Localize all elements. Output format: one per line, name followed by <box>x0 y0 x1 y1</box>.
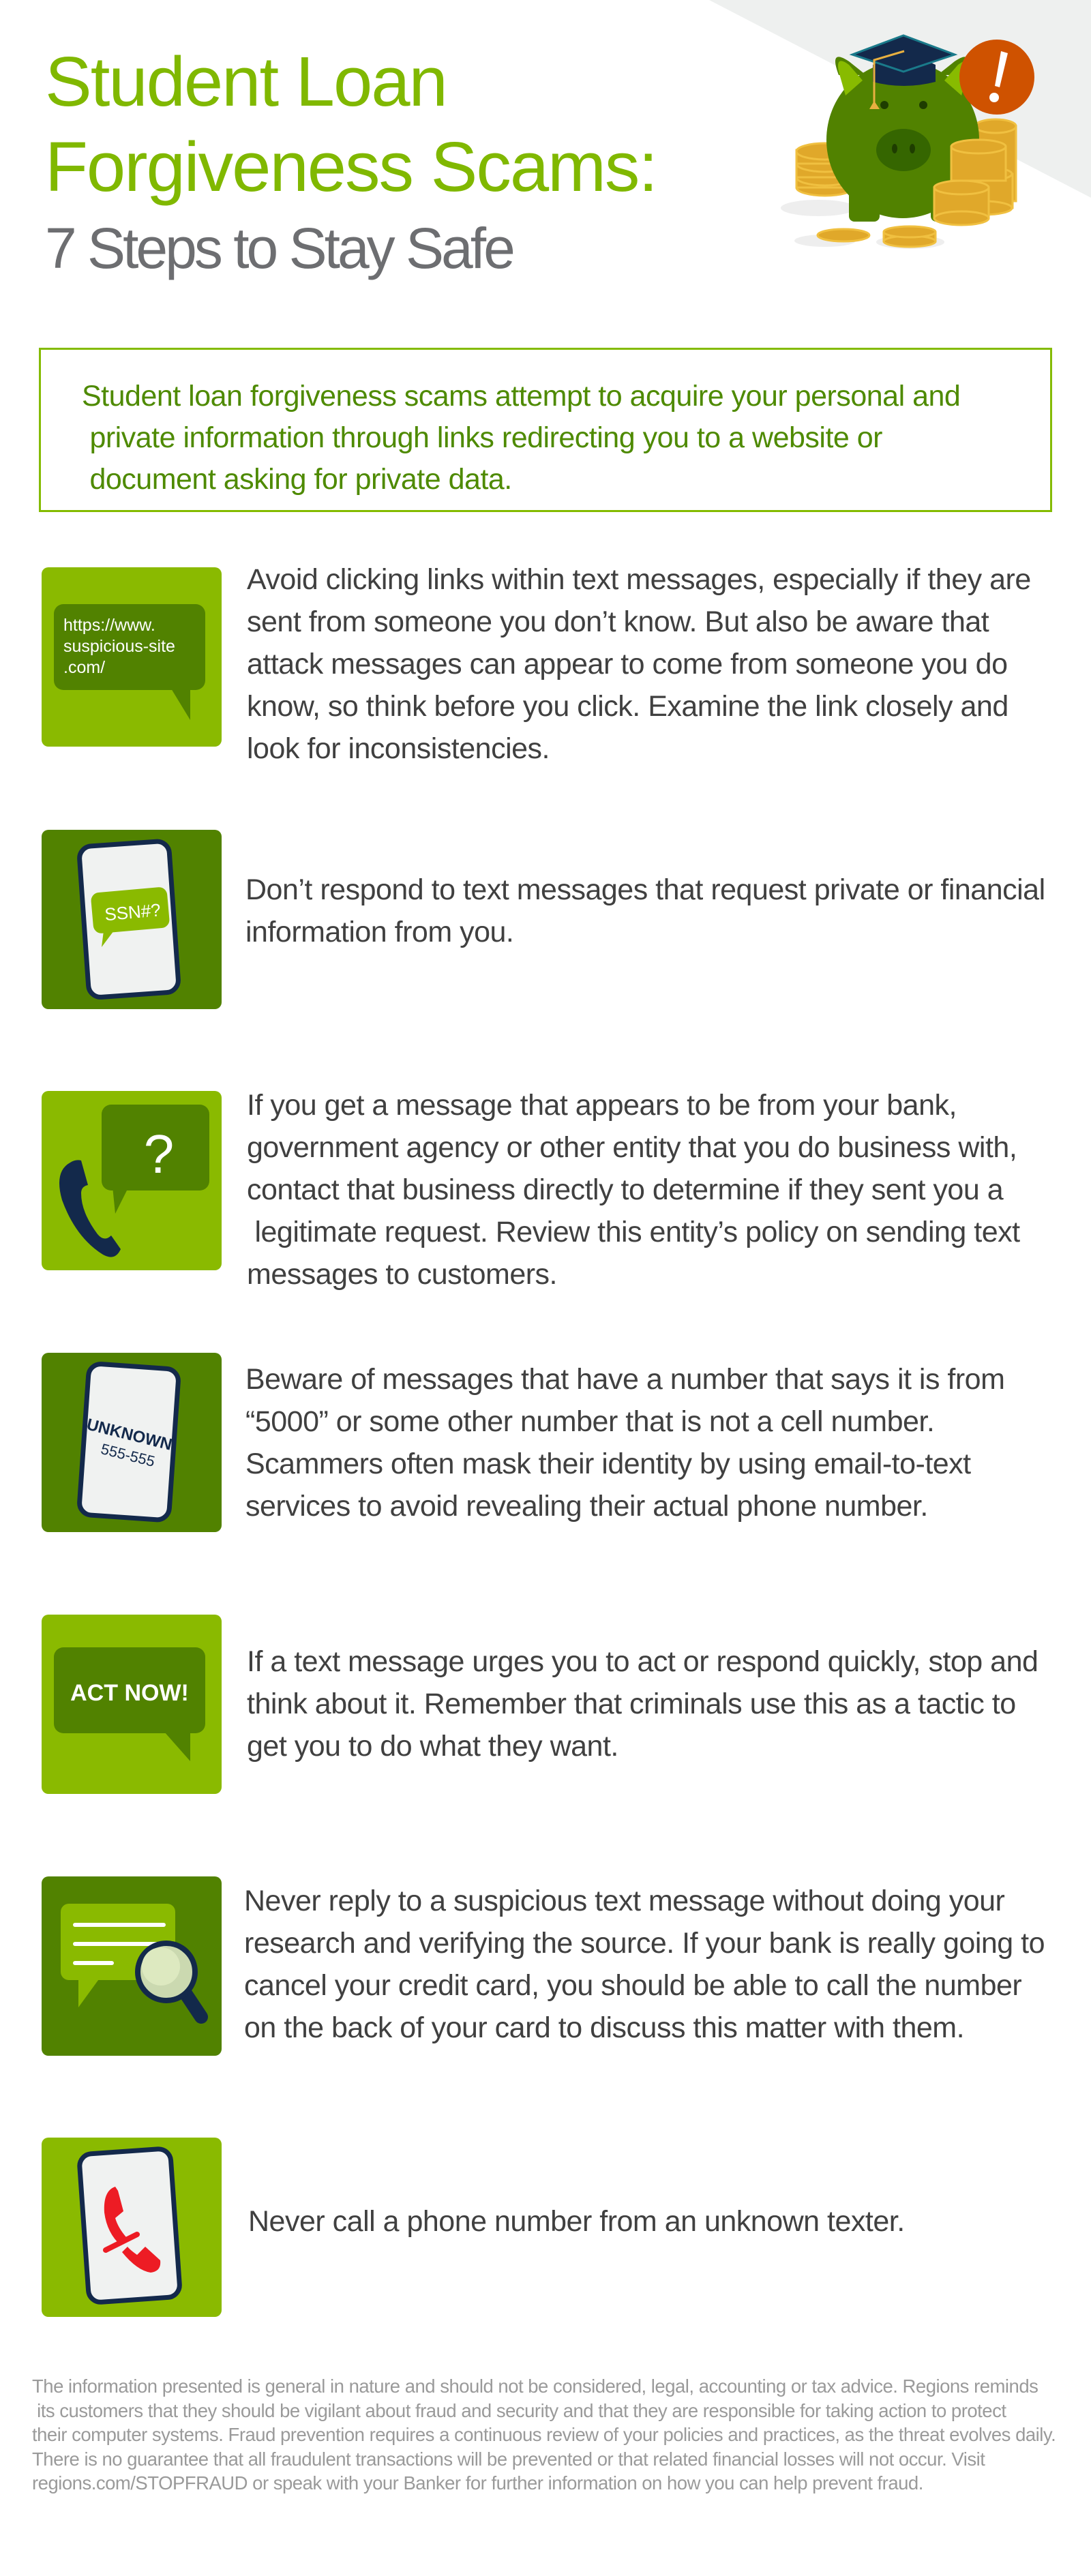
step 3 text: contact that business directly to determine if they sent you a <box>247 1173 1003 1206</box>
step 2 text: Don’t respond to text messages that request private or financial <box>245 873 1045 906</box>
step 2 icon: phone SSN <box>42 830 222 1009</box>
step 3 icon: phone with question: ? <box>144 1124 174 1184</box>
step 3 text: If you get a message that appears to be from your bank, <box>247 1089 957 1122</box>
title: Forgiveness Scams: <box>45 128 657 206</box>
footer disclaimer: There is no guarantee that all fraudulent transactions will be prevented or that related financial losses will not occur. Visit <box>32 2448 985 2470</box>
step 6 text: on the back of your card to discuss this matter with them. <box>244 2011 964 2044</box>
step 4 icon: unknown caller phone: UNKNOWN <box>85 1416 174 1454</box>
illustration: piggy bank with coins <box>781 34 1034 249</box>
intro box <box>39 348 1052 512</box>
step 6 text <box>244 1885 1045 2044</box>
step 4 text: Scammers often mask their identity by using email-to-text <box>245 1448 971 1480</box>
background triangle <box>709 0 1091 198</box>
footer disclaimer: The information presented is general in nature and should not be considered, legal, accounting or tax advice. Regions reminds <box>32 2376 1038 2397</box>
step 3 text: legitimate request. Review this entity’s policy on sending text <box>254 1216 1020 1248</box>
step 1 icon: link bubble <box>42 567 222 747</box>
footer disclaimer: its customers that they should be vigilant about fraud and security and that they are responsible for taking action to protect <box>37 2400 1006 2421</box>
step 5 icon: act now bubble <box>42 1615 222 1794</box>
step 1 text: look for inconsistencies. <box>247 732 550 765</box>
intro box: Student loan forgiveness scams attempt to acquire your personal and <box>82 380 960 413</box>
step 4 icon: unknown caller phone <box>42 1353 222 1532</box>
step 1 text: attack messages can appear to come from someone you do <box>247 648 1008 680</box>
step 1 icon: link bubble: .com/ <box>63 658 105 677</box>
step 1 text: know, so think before you click. Examine the link closely and <box>247 690 1008 723</box>
step 3 text: government agency or other entity that you do business with, <box>247 1131 1017 1164</box>
footer disclaimer: regions.com/STOPFRAUD or speak with your Banker for further information on how you can help prevent fraud. <box>32 2472 923 2493</box>
step 4 text: “5000” or some other number that is not a cell number. <box>245 1405 934 1438</box>
step 6 text: Never reply to a suspicious text message without doing your <box>244 1885 1004 1917</box>
step 4 text: services to avoid revealing their actual phone number. <box>245 1490 928 1523</box>
step 3 text <box>247 1089 1020 1291</box>
step 4 text: Beware of messages that have a number that says it is from <box>245 1363 1004 1396</box>
step 7 icon: phone with red handset <box>42 2138 222 2317</box>
title: Student Loan <box>45 42 447 121</box>
step 6 text: research and verifying the source. If your bank is really going to <box>244 1927 1045 1960</box>
intro box: private information through links redirecting you to a website or <box>89 421 882 454</box>
step 5 icon: act now bubble: ACT NOW! <box>70 1680 189 1706</box>
step 2 icon: phone SSN: SSN#? <box>104 899 162 925</box>
step 2 text <box>245 873 1045 948</box>
step 4 icon: unknown caller phone: 555-555 <box>99 1440 157 1470</box>
step 7 text: Never call a phone number from an unknown texter. <box>248 2205 905 2238</box>
step 1 icon: link bubble: suspicious-site <box>63 637 175 656</box>
step 6 text: cancel your credit card, you should be able to call the number <box>244 1969 1021 2002</box>
step 2 text: information from you. <box>245 916 513 948</box>
step 5 text: think about it. Remember that criminals use this as a tactic to <box>247 1688 1016 1720</box>
step 1 text <box>247 563 1031 765</box>
step 5 text <box>247 1645 1038 1763</box>
title <box>45 42 657 280</box>
step 1 text: Avoid clicking links within text messages, especially if they are <box>247 563 1031 596</box>
footer disclaimer <box>32 2376 1056 2493</box>
step 1 icon: link bubble: https://www. <box>63 616 155 635</box>
intro box: document asking for private data. <box>89 463 512 496</box>
footer disclaimer: their computer systems. Fraud prevention requires a continuous review of your policies and practices, as the threat evolves daily. <box>32 2424 1056 2445</box>
step 5 text: If a text message urges you to act or respond quickly, stop and <box>247 1645 1038 1678</box>
step 1 text: sent from someone you don’t know. But also be aware that <box>247 605 989 638</box>
step 6 icon: message with magnifier <box>42 1876 222 2056</box>
step 5 text: get you to do what they want. <box>247 1730 618 1763</box>
subtitle: 7 Steps to Stay Safe <box>45 216 513 280</box>
step 3 icon: phone with question <box>42 1091 222 1270</box>
step 3 text: messages to customers. <box>247 1258 557 1291</box>
step 4 text <box>245 1363 1004 1523</box>
